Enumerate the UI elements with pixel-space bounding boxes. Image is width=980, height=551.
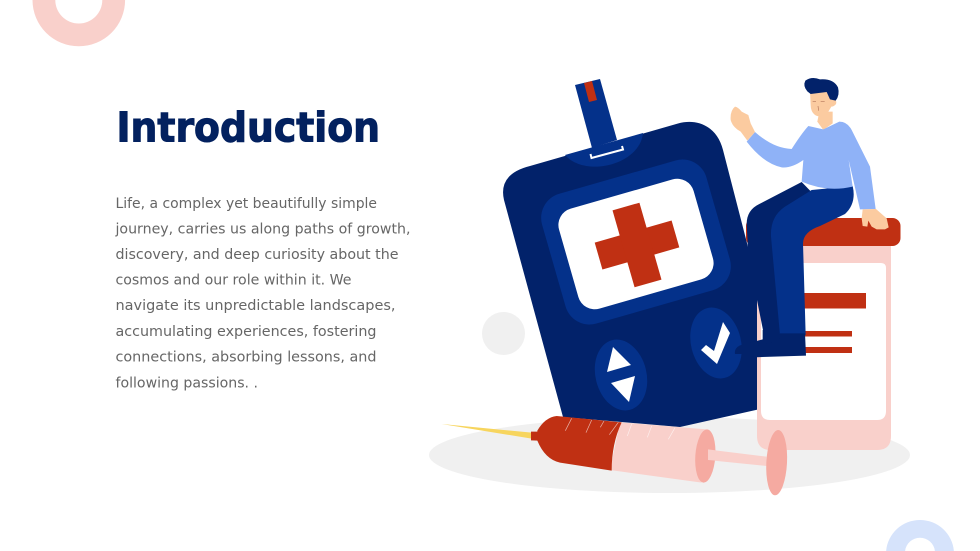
- hand on cap: [862, 209, 889, 229]
- barrel end: [693, 429, 717, 483]
- medicine bottle: [746, 218, 900, 450]
- body paragraph: Life, a complex yet beautifully simple: [116, 195, 377, 212]
- body paragraph: following passions. .: [116, 375, 258, 392]
- red barrel: [537, 416, 622, 471]
- bottle body: [757, 246, 891, 450]
- title: Introduction: [116, 104, 380, 152]
- strip slot: [565, 133, 643, 167]
- red cross icon: [588, 196, 686, 294]
- decorative blue ring bottom right: [886, 520, 954, 551]
- slot bracket: [590, 146, 623, 158]
- syringe: [442, 416, 789, 496]
- meter body: [503, 122, 778, 427]
- body paragraph: discovery, and deep curiosity about the: [116, 246, 399, 263]
- check button: [683, 302, 749, 384]
- plunger disc: [765, 430, 789, 496]
- neck: [817, 112, 833, 130]
- needle: [442, 424, 532, 439]
- screen bezel: [535, 154, 737, 330]
- hair: [804, 78, 839, 101]
- test strip: [575, 79, 617, 148]
- screen: [554, 175, 718, 313]
- head: [810, 92, 836, 116]
- plunger rod: [707, 449, 767, 466]
- back leg: [747, 182, 813, 332]
- grey ground ellipse: [429, 417, 910, 493]
- raised hand: [731, 107, 755, 141]
- body paragraph: cosmos and our role within it. We: [116, 272, 352, 288]
- body paragraph: connections, absorbing lessons, and: [116, 349, 376, 366]
- bottle cap: [746, 218, 900, 246]
- body paragraph: [115, 195, 410, 392]
- body paragraph: journey, carries us along paths of growth,: [115, 220, 410, 238]
- front leg: [771, 186, 854, 335]
- decorative pink ring top left: [32, 0, 125, 46]
- person sitting: [731, 78, 889, 357]
- body paragraph: navigate its unpredictable landscapes,: [116, 297, 396, 314]
- bottle label: [761, 263, 886, 420]
- body paragraph: accumulating experiences, fostering: [116, 323, 376, 340]
- pink barrel: [610, 422, 707, 483]
- shirt: [747, 122, 876, 209]
- arrows button: [588, 334, 654, 416]
- glucose meter: [503, 79, 778, 427]
- tick marks: [565, 418, 675, 439]
- face details: [813, 102, 825, 111]
- syringe tip: [531, 432, 538, 441]
- label lines: [776, 293, 866, 353]
- front shoe: [753, 333, 806, 357]
- back shoe: [735, 330, 782, 354]
- grey circle: [482, 312, 525, 355]
